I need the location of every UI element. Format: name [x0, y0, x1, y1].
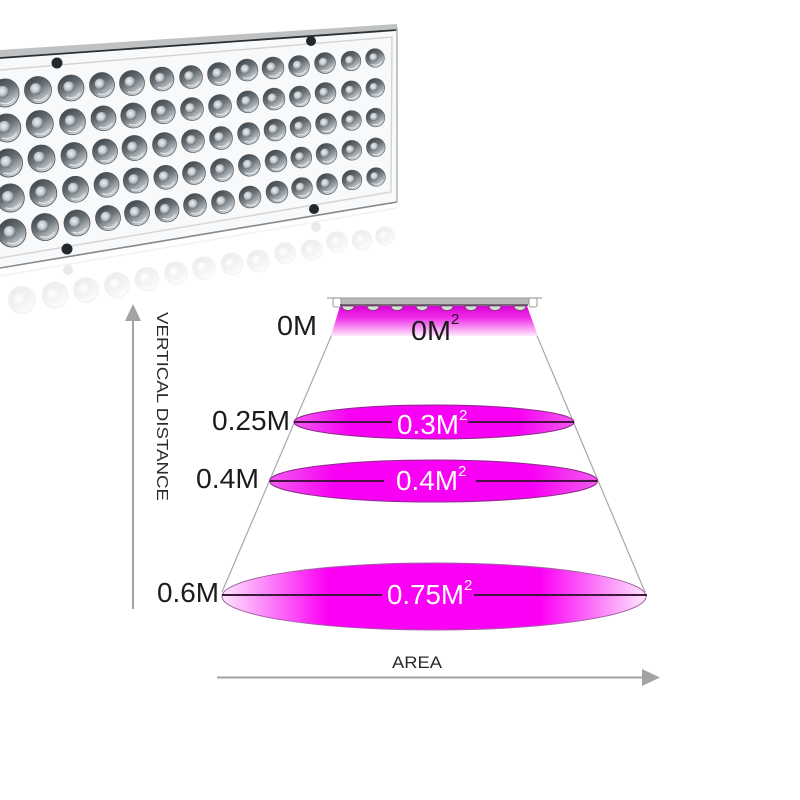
- distance label 0.6M: 0.6M: [157, 577, 219, 608]
- LED lenses: [0, 49, 385, 247]
- area label 0.75M2: 2: [464, 577, 472, 594]
- distance label 0.25M: 0.25M: [212, 405, 290, 436]
- area label 0.75M2: 0.75M: [387, 579, 464, 610]
- area label 0.3M2: 2: [459, 407, 467, 424]
- panel reflection: [0, 208, 397, 314]
- level 0 area superscript: 2: [451, 311, 459, 328]
- horizontal axis arrow: [217, 669, 660, 686]
- small light fixture with magenta glow: [327, 298, 542, 336]
- level 0 distance label: 0M: [277, 310, 317, 341]
- area label 0.4M2: 0.4M: [396, 465, 458, 496]
- panel screws: [52, 36, 319, 254]
- ellipse 0.25M: [294, 405, 574, 440]
- LED panel: [0, 24, 397, 268]
- horizontal axis label: AREA: [392, 653, 443, 672]
- area label 0.4M2: 2: [458, 463, 466, 480]
- vertical axis arrow: [125, 304, 141, 609]
- vertical axis label: VERTICAL DISTANCE: [153, 312, 170, 501]
- ellipse 0.4M: [270, 460, 598, 502]
- ellipse 0.6M: [222, 563, 647, 630]
- level 0 area label: 0M: [411, 315, 451, 346]
- distance label 0.4M: 0.4M: [196, 463, 259, 494]
- area label 0.3M2: 0.3M: [397, 409, 459, 440]
- light cone edges: [222, 312, 645, 592]
